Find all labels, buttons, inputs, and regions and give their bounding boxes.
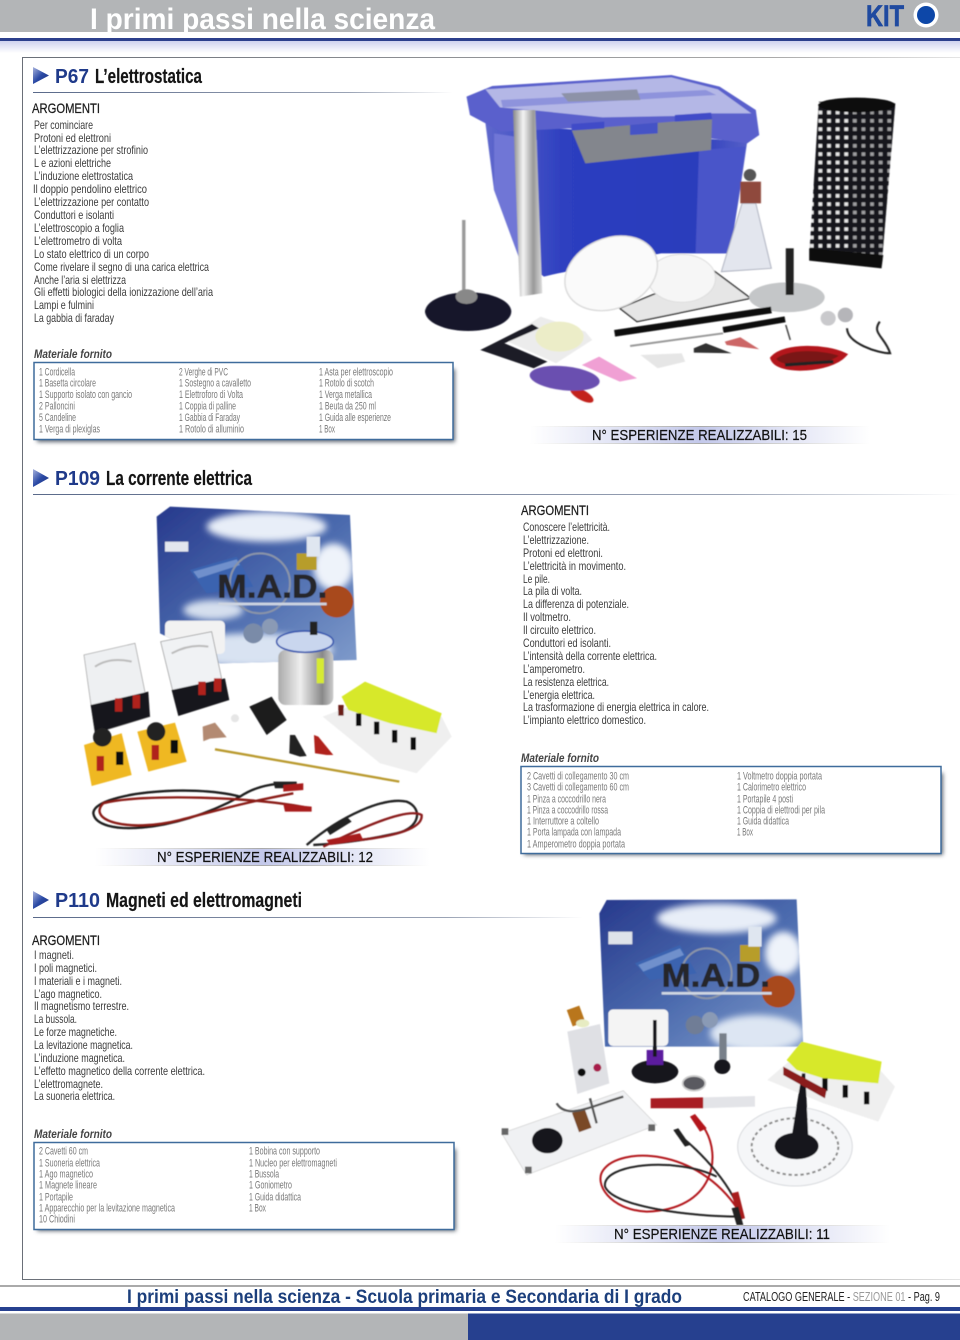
text block: argomenti P109: La resistenza elettrica.	[523, 675, 609, 689]
KIT badge	[866, 0, 938, 33]
callout: materiale fornito P109: Materiale fornito	[521, 753, 599, 765]
callout: materiale fornito P67: 1 Sostegno a cavalletto	[179, 378, 251, 390]
section heading: P109: P109	[55, 468, 100, 490]
callout: materiale fornito P110: 1 Suoneria elettrica	[39, 1158, 101, 1170]
text block: argomenti P109: Conduttori ed isolanti.	[523, 636, 611, 650]
callout: materiale fornito P67: 2 Palloncini	[39, 400, 75, 412]
callout: materiale fornito P67: 5 Candeline	[39, 412, 76, 424]
callout: materiale fornito P109: 1 Voltmetro doppia portata	[737, 770, 823, 782]
footer colour bands	[0, 1307, 960, 1340]
callout: materiale fornito P109: 1 Pinza a coccodrillo nera	[527, 794, 607, 806]
photo: magnetism kit	[502, 899, 895, 1225]
text block: argomenti P110: Le forze magnetiche.	[34, 1025, 117, 1039]
text block: argomenti P109: Le pile.	[523, 572, 550, 586]
text block: argomenti P67: L’elettrometro di volta	[34, 234, 122, 248]
text block: argomenti P67: ARGOMENTI	[32, 100, 100, 116]
text block: argomenti P109: Il voltmetro.	[523, 610, 571, 624]
text block: argomenti P110: La suoneria elettrica.	[34, 1089, 115, 1103]
callout: materiale fornito P109: 1 Calorimetro elettrico	[737, 782, 806, 794]
callout: materiale fornito P109: 3 Cavetti di collegamento 60 cm	[527, 782, 629, 794]
callout: materiale fornito P110: 1 Bussola	[249, 1168, 280, 1180]
text block: argomenti P67: Il doppio pendolino elettrico	[33, 182, 147, 196]
text block: argomenti P110: L’elettromagnete.	[34, 1077, 103, 1091]
text block: argomenti P109: L’impianto elettrico domestico.	[523, 713, 646, 727]
callout: materiale fornito P110: 1 Apparecchio per la levitazione magnetica	[39, 1202, 176, 1214]
text block: argomenti P109: ARGOMENTI	[521, 502, 589, 518]
text block: argomenti P109: La differenza di potenziale.	[523, 597, 629, 611]
section heading: P110	[33, 890, 583, 918]
text block: argomenti P110	[32, 932, 205, 1103]
section heading: P110: P110	[55, 890, 100, 912]
text block: argomenti P109: L’amperometro.	[523, 662, 585, 676]
callout: materiale fornito P67: 1 Verga metallica	[319, 389, 373, 401]
callout: materiale fornito P67: 1 Supporto isolato con gancio	[39, 389, 132, 401]
callout: materiale fornito P109: 1 Box	[737, 826, 753, 838]
callout: materiale fornito P109: 1 Amperometro doppia portata	[527, 838, 626, 850]
text block: argomenti P67: L’elettroscopio a foglia	[34, 221, 124, 235]
text block: argomenti P67: L’induzione elettrostatica	[34, 169, 133, 183]
callout: materiale fornito P109: 1 Pinza a coccodrillo rossa	[527, 804, 609, 816]
callout: materiale fornito P109: 1 Porta lampada con lampada	[527, 826, 622, 838]
callout: materiale fornito P110: 1 Portapile	[39, 1192, 73, 1204]
callout: materiale fornito P67: 1 Box	[319, 424, 335, 436]
callout: materiale fornito P67: 2 Verghe di PVC	[179, 366, 228, 378]
callout: materiale fornito P109: 1 Coppia di elettrodi per pila	[737, 804, 826, 816]
text block: argomenti P67: Come rivelare il segno di una carica elettrica	[34, 260, 209, 274]
footer page reference: CATALOGO GENERALE - SEZIONE 01 - Pag. 9	[743, 1290, 940, 1304]
text block: argomenti P67: Per cominciare	[34, 118, 93, 132]
text block: argomenti P109: Il circuito elettrico.	[523, 623, 596, 637]
experiments bar P110	[555, 1225, 890, 1243]
footer title: I primi passi nella scienza - Scuola primaria e Secondaria di I grado	[127, 1286, 682, 1308]
callout: materiale fornito P109: 1 Guida didattica	[737, 816, 790, 828]
text block: argomenti P110: L’induzione magnetica.	[34, 1051, 125, 1065]
text block: argomenti P110: Il magnetismo terrestre.	[34, 999, 129, 1013]
experiments bar P109	[95, 848, 430, 866]
photo: magnetism kit: M.A.D.	[662, 958, 770, 994]
text block: argomenti P110: L’ago magnetico.	[34, 987, 102, 1001]
text block: argomenti P67: Conduttori e isolanti	[34, 208, 114, 222]
text block: argomenti P67: Lo stato elettrico di un corpo	[34, 247, 149, 261]
experiments bar P109: N° ESPERIENZE REALIZZABILI: 12	[157, 849, 373, 866]
callout: materiale fornito P67: 1 Basetta circolare	[39, 378, 96, 390]
text block: argomenti P109: Conoscere l’elettricità.	[523, 520, 610, 534]
callout: materiale fornito P110: 10 Chiodini	[39, 1214, 75, 1226]
text block: argomenti P110: I poli magnetici.	[34, 961, 97, 975]
text block: argomenti P67: Anche l’aria si elettrizza	[34, 273, 126, 287]
callout: materiale fornito P67: 1 Rotolo di alluminio	[179, 424, 244, 436]
callout: materiale fornito P110: 2 Cavetti 60 cm	[39, 1146, 88, 1158]
callout: materiale fornito P110	[34, 1129, 456, 1231]
text block: argomenti P110: I materiali e i magneti.	[34, 974, 122, 988]
text block: argomenti P67: Gli effetti biologici della ionizzazione dell’aria	[34, 285, 213, 299]
callout: materiale fornito P110: 1 Guida didattica	[249, 1192, 302, 1204]
text block: argomenti P109: L’energia elettrica.	[523, 688, 595, 702]
text block: argomenti P67: L’elettrizzazione per contatto	[34, 195, 149, 209]
callout: materiale fornito P109: 1 Portapile 4 posti	[737, 794, 793, 806]
text block: argomenti P109: Protoni ed elettroni.	[523, 546, 603, 560]
text block: argomenti P109: L’elettricità in movimento.	[523, 559, 626, 573]
callout: materiale fornito P67: 1 Elettroforo di Volta	[179, 389, 244, 401]
section heading: P109: La corrente elettrica	[106, 468, 253, 490]
text block: argomenti P67: Lampi e fulmini	[34, 298, 94, 312]
section heading: P67: P67	[55, 66, 89, 88]
header band	[0, 0, 960, 53]
callout: materiale fornito P67: 1 Gabbia di Faraday	[179, 412, 240, 424]
callout: materiale fornito P110: 1 Goniometro	[249, 1180, 292, 1192]
text block: argomenti P67	[32, 100, 213, 325]
text block: argomenti P110: La levitazione magnetica.	[34, 1038, 133, 1052]
callout: materiale fornito P110: Materiale fornito	[34, 1129, 112, 1141]
text block: argomenti P67: L e azioni elettriche	[34, 156, 111, 170]
callout: materiale fornito P67: 1 Guida alle esperienze	[319, 412, 391, 424]
text block: argomenti P109: L’intensità della corrente elettrica.	[523, 649, 657, 663]
text block: argomenti P109: La pila di volta.	[523, 584, 582, 598]
text block: argomenti P109	[521, 502, 709, 727]
callout: materiale fornito P67: 1 Asta per elettroscopio	[319, 366, 393, 378]
callout: materiale fornito P67: 1 Cordicella	[39, 366, 76, 378]
section heading: P67	[33, 66, 453, 93]
text block: argomenti P110: La bussola.	[34, 1012, 77, 1026]
experiments bar P110: N° ESPERIENZE REALIZZABILI: 11	[614, 1226, 830, 1243]
callout: materiale fornito P67: Materiale fornito	[34, 349, 112, 361]
callout: materiale fornito P67: 1 Beuta da 250 ml	[319, 400, 376, 412]
text block: argomenti P67: L’elettrizzazione per strofinio	[34, 143, 148, 157]
callout: materiale fornito P110: 1 Bobina con supporto	[249, 1146, 320, 1158]
photo: electric current kit: M.A.D.	[217, 568, 327, 604]
experiments bar P67: N° ESPERIENZE REALIZZABILI: 15	[592, 427, 807, 444]
callout: materiale fornito P67: 1 Verga di plexiglas	[39, 424, 100, 436]
callout: materiale fornito P110: 1 Magnete lineare	[39, 1180, 97, 1192]
page title: I primi passi nella scienza	[90, 3, 435, 36]
text block: argomenti P110: L’effetto magnetico della corrente elettrica.	[34, 1064, 205, 1078]
callout: materiale fornito P67: 1 Rotolo di scotch	[319, 378, 374, 390]
callout: materiale fornito P109	[521, 753, 943, 855]
section heading: P110: Magneti ed elettromagneti	[106, 890, 302, 912]
callout: materiale fornito P110: 1 Nucleo per elettromagneti	[249, 1158, 337, 1170]
callout: materiale fornito P110: 1 Box	[249, 1202, 266, 1214]
text block: argomenti P110: I magneti.	[34, 948, 74, 962]
experiments bar P67	[530, 426, 870, 444]
callout: materiale fornito P109: 1 Interruttore a coltello	[527, 816, 599, 828]
text block: argomenti P109: La trasformazione di energia elettrica in calore.	[523, 700, 709, 714]
callout: materiale fornito P67: 1 Coppia di palline	[179, 400, 236, 412]
callout: materiale fornito P109: 2 Cavetti di collegamento 30 cm	[527, 770, 629, 782]
section heading: P67: L’elettrostatica	[95, 66, 203, 88]
text block: argomenti P67: Protoni ed elettroni	[34, 131, 111, 145]
photo: electric current kit	[84, 507, 452, 847]
text block: argomenti P109: L’elettrizzazione.	[523, 533, 589, 547]
text block: argomenti P110: ARGOMENTI	[32, 932, 100, 948]
section heading: P109	[33, 468, 960, 495]
photo: electrostatics kit	[425, 75, 895, 406]
callout: materiale fornito P67	[34, 349, 455, 442]
text block: argomenti P67: La gabbia di faraday	[34, 311, 114, 325]
KIT badge: KIT	[866, 0, 904, 33]
callout: materiale fornito P110: 1 Ago magnetico	[39, 1168, 93, 1180]
